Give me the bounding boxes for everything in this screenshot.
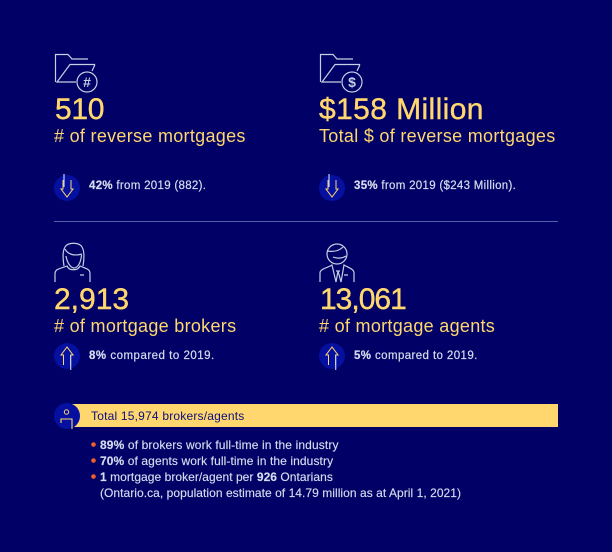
change note: 35% from 2019 ($243 Million). — [354, 180, 516, 192]
bullet item: broker per population: 1 mortgage broker/agent per 926 Ontarians — [100, 470, 333, 484]
value: $158 Million: $158 Million — [319, 93, 484, 126]
panel: mortgage agents — [319, 243, 495, 370]
change note: 8% compared to 2019. — [89, 350, 215, 362]
icon: folder with number sign — [54, 54, 98, 93]
icon: up arrow — [54, 343, 80, 370]
change note: 5% compared to 2019. — [354, 350, 478, 362]
icon: down arrow — [319, 174, 345, 201]
icon: folder with number sign: # — [83, 74, 91, 90]
label: number of reverse mortgages: # of reverse mortgages — [54, 126, 246, 146]
bullet item: agents full-time: 70% of agents work full-time in the industry — [100, 454, 333, 468]
icon: female broker — [54, 242, 91, 282]
value: 13,061: 13,061 — [320, 283, 406, 316]
icon: up arrow — [319, 343, 345, 370]
banner text: Total 15,974 brokers/agents — [91, 409, 244, 423]
bullet item: brokers full-time: 89% of brokers work full-time in the industry — [100, 438, 339, 452]
panel: reverse mortgage count — [54, 54, 246, 201]
source note: (Ontario.ca, population estimate of 14.79 million as at April 1, 2021) — [100, 486, 461, 500]
label: total dollars of reverse mortgages: Total $ of reverse mortgages — [319, 126, 556, 146]
icon: down arrow — [54, 174, 80, 201]
bullet markers — [91, 442, 96, 479]
panel: total banner — [54, 403, 558, 429]
icon: folder with dollar sign — [320, 54, 363, 93]
label: number of mortgage brokers: # of mortgage brokers — [54, 316, 236, 336]
change note: 42% from 2019 (882). — [89, 180, 206, 192]
list: key facts — [91, 438, 461, 500]
value: 510: 510 — [55, 93, 104, 126]
panel: mortgage brokers — [54, 242, 236, 370]
icon: person badge — [54, 403, 80, 429]
label: number of mortgage agents: # of mortgage agents — [319, 316, 495, 336]
icon: male agent — [319, 243, 355, 282]
banner bar — [66, 404, 558, 427]
value: 2,913: 2,913 — [54, 283, 129, 316]
panel: reverse mortgage total — [319, 54, 556, 201]
icon: folder with dollar sign: $ — [348, 74, 356, 90]
